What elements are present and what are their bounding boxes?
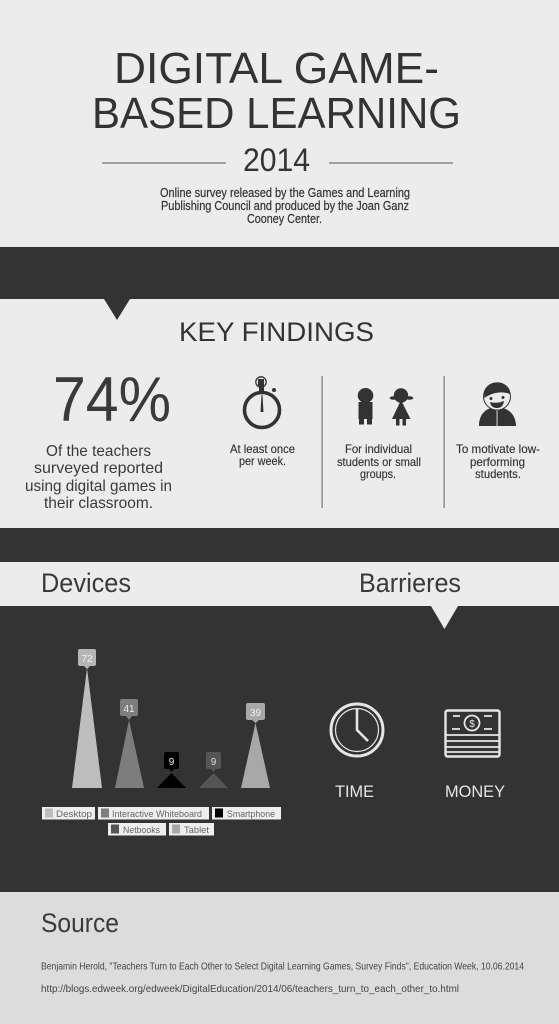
icon: clock [331,704,383,756]
legend item: tablet: Tablet [184,825,209,836]
title: DIGITAL GAME- [114,44,439,93]
stat description [25,443,172,512]
stat: 74%: 74% [53,365,171,435]
survey description [160,186,410,226]
heading: key findings: KEY FINDINGS [179,317,374,347]
text: grouping: For individual [345,442,412,456]
title: BASED LEARNING [92,89,461,138]
bar: smartphone 9: 9 [169,757,175,768]
stat description: using digital games in [25,478,172,495]
icon: money stack [446,710,500,756]
pointer [431,606,458,629]
heading: source: Source [41,908,119,938]
bar: tablet 39: 39 [250,708,261,719]
legend item: netbooks: Netbooks [123,825,160,836]
panel: header [0,0,559,247]
year with rules: 2014 [243,142,310,178]
icon: smiling student [479,382,516,426]
band: dark separator [0,528,559,562]
bar: netbooks 9: 9 [211,757,217,768]
source url: http://blogs.edweek.org/edweek/DigitalEducation/2014/06/teachers_turn_to_each_other_to.html [41,983,459,995]
survey description: Cooney Center. [247,212,322,226]
stat description: their classroom. [44,495,153,512]
text: frequency [230,442,295,468]
text: motivation [456,442,540,481]
icon: boy and girl [358,388,413,426]
survey description: Publishing Council and produced by the Joan Ganz [161,199,409,213]
legend item: desktop: Desktop [56,809,92,820]
panel: source [0,892,559,1024]
legend item: tablet [169,823,214,836]
bar: tablet 39 [241,703,270,788]
text: motivation: students. [475,467,521,481]
band: dark separator [0,247,559,299]
text: grouping: groups. [360,467,396,481]
stat description: surveyed reported [34,460,163,477]
bar: interactive whiteboard 41: 41 [123,704,135,715]
text: frequency: At least once [230,442,295,456]
chart: devices cone chart [72,649,270,788]
legend item: interactive whiteboard: Interactive Whiteboard [112,809,202,820]
icon: stopwatch [244,377,280,428]
survey description: Online survey released by the Games and Learning [160,186,410,200]
text: motivation: performing [470,455,525,469]
divider [444,376,445,508]
bar: netbooks 9 [199,752,228,788]
legend item: smartphone [212,807,281,820]
bar: interactive whiteboard 41 [115,699,144,788]
text: grouping: students or small [337,455,421,469]
stat description: Of the teachers [46,443,151,460]
bar: smartphone 9 [157,752,186,788]
legend item: desktop [42,807,95,820]
text: frequency: per week. [239,454,286,468]
pointer [104,299,130,320]
bar: desktop 72: 72 [81,654,93,665]
label: money: MONEY [445,782,505,801]
legend item: netbooks [108,823,166,836]
heading: devices: Devices [41,568,131,598]
text: motivation: To motivate low- [456,442,540,456]
text: grouping [337,442,421,481]
title [92,44,461,138]
panel: devices and barriers [0,606,559,892]
panel: section headings [0,562,559,606]
bar: desktop 72 [72,649,102,788]
divider [322,376,323,508]
icon: money stack: $ [469,719,475,730]
panel: key findings [0,299,559,528]
heading: barrieres: Barrieres [359,568,461,598]
label: time: TIME [335,782,374,801]
legend item: smartphone: Smartphone [227,809,275,820]
legend [42,807,281,836]
